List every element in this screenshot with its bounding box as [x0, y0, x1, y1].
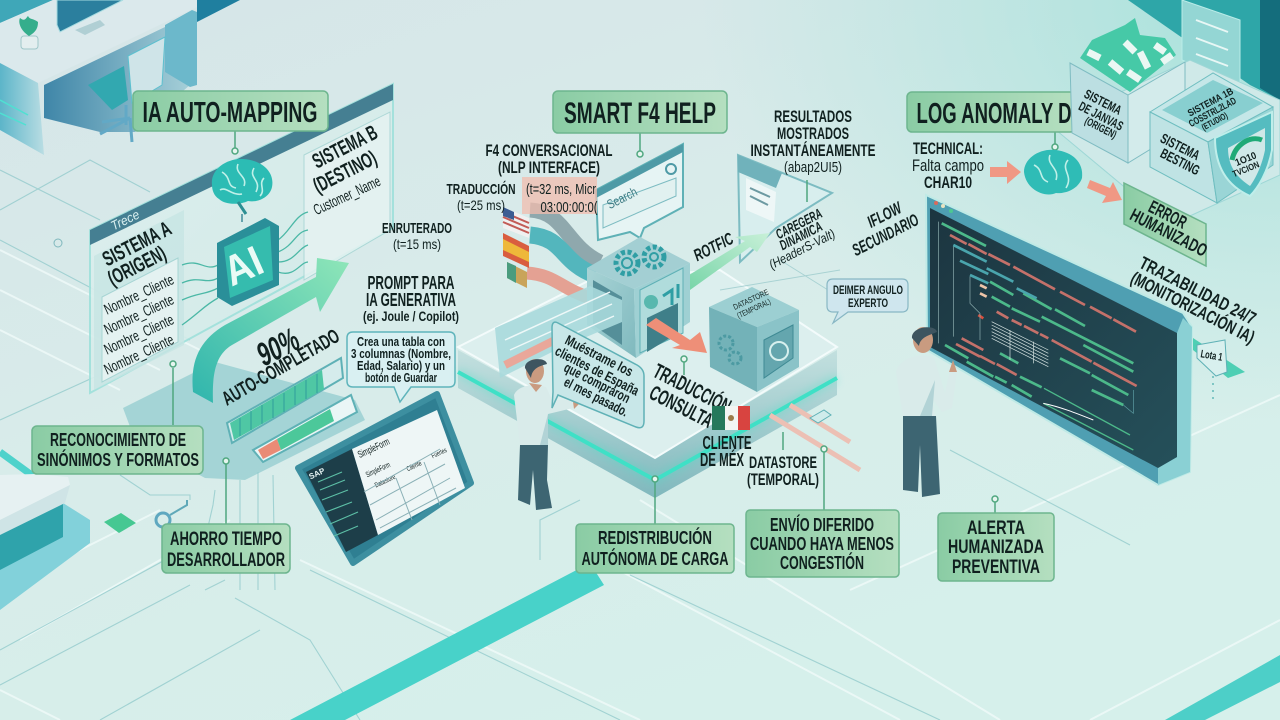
conversational F4 heading: F4 CONVERSACIONAL: [486, 141, 612, 160]
label: deferred sending: CUANDO HAYA MENOS: [750, 534, 894, 554]
routed text: (t=15 ms): [393, 236, 441, 252]
heading: Smart F4 Help: [553, 91, 727, 157]
destination box with shield: BESTING: [1158, 145, 1203, 178]
prompt callout: [347, 332, 455, 402]
speech bubble: clientes de España: [553, 343, 642, 399]
generative AI prompt heading: IA GENERATIVA: [366, 290, 456, 310]
label: autonomous redistribution: [576, 476, 734, 573]
icon: AI chip: [216, 218, 279, 306]
technical error text: Falta campo: [912, 156, 984, 175]
monitor: [57, 0, 123, 32]
column system B: [304, 112, 390, 280]
icon: shield gauge: TVCION: [1231, 159, 1261, 179]
destination box with shield: [1150, 73, 1273, 203]
label: recognition of synonyms: [32, 426, 203, 474]
icon: shield gauge: [1215, 112, 1272, 196]
device bottom left: [0, 452, 187, 610]
icon: brain: [212, 159, 272, 222]
tablet code pane: [306, 449, 378, 552]
query translation: TRADUCCIÓN: [649, 359, 735, 419]
heading: Log anomaly detection: LOG ANOMALY D: [916, 98, 1072, 130]
label: autonomous redistribution: REDISTRIBUCIÓN: [598, 527, 712, 548]
datastore label: DATASTORE: [749, 453, 817, 472]
icon: Spain flag: [503, 233, 529, 268]
person speaking: [514, 359, 580, 510]
batch document: [1193, 338, 1245, 402]
column system A: Nombre_Cliente: [102, 331, 177, 378]
route label: ROTFIC: [690, 229, 737, 265]
source box: (ORIGEN): [1082, 115, 1118, 141]
search window: [596, 144, 683, 240]
results text: RESULTADOS: [774, 107, 852, 126]
secondary iFlow: [849, 198, 922, 260]
generative AI prompt heading: PROMPT PARA: [368, 273, 454, 293]
highlighted timing block: 03:00:00:0(: [540, 199, 598, 216]
generative AI prompt heading: [363, 273, 459, 324]
green route arrow: [689, 233, 770, 290]
tablet: SimpleForm: [364, 460, 392, 479]
datastore safe: [709, 287, 799, 392]
small results window: [738, 155, 832, 262]
window title: Trece: [108, 207, 142, 233]
expert callout: EXPERTO: [848, 296, 888, 310]
prompt callout: Edad, Salario) y un: [357, 358, 445, 373]
destination box with shield: SISTEMA: [1158, 130, 1203, 163]
label: recognition of synonyms: RECONOCIMIENTO DE: [50, 430, 186, 450]
outgoing stream: [770, 405, 860, 470]
tablet: SAP: [308, 466, 327, 481]
desk left pedestal: [0, 63, 44, 155]
teal floor bands: [290, 563, 1280, 720]
column system B: Customer_Name: [311, 173, 383, 219]
arrow: to humanized error: [1087, 180, 1122, 203]
connector: recognition: [172, 368, 174, 425]
customer label: DE MÉX: [700, 449, 744, 470]
glass window on wall: [1182, 0, 1240, 85]
label: preventive alert: [938, 496, 1054, 581]
documents pile: [1080, 18, 1176, 92]
prompt callout: botón de Guardar: [365, 370, 437, 385]
under-desk shadow: [44, 15, 190, 132]
icon: shield gauge: 1O10: [1234, 150, 1259, 169]
technical error text: [912, 139, 984, 192]
dynamic load label: CAREGERA: [773, 205, 825, 242]
tablet: [298, 394, 471, 563]
speech bubble: [552, 322, 644, 428]
translation timing: TRADUCCIÓN: [446, 180, 516, 198]
results text: INSTANTÁNEAMENTE: [750, 141, 876, 160]
column system A: (ORIGEN): [104, 242, 170, 291]
batch document: Lota 1: [1200, 348, 1223, 364]
dark teal wall: [1128, 0, 1280, 100]
tablet: Fuertes: [431, 447, 448, 460]
glass window: [90, 84, 393, 393]
plant: [19, 16, 38, 49]
heading: IA auto-mapping: [133, 91, 328, 154]
green chip: [104, 513, 136, 533]
chair: [88, 37, 165, 142]
label: deferred sending: [746, 446, 899, 577]
panel: IA auto-mapping: AUTO-COMPLETADO: [218, 325, 344, 410]
destination box with shield: (ETUDIO): [1200, 110, 1229, 132]
technical error text: TECHNICAL:: [913, 139, 983, 158]
tablet: Datastore: [374, 474, 397, 489]
icon: gears: [616, 247, 664, 274]
conveyor: [495, 286, 622, 378]
secondary iFlow: SECUNDARIO: [849, 210, 922, 260]
destination box with shield: COSSTRL2LAD: [1187, 96, 1238, 130]
progress bar two: [253, 395, 357, 462]
tablet: SimpleForm: [356, 437, 392, 461]
source box: [1070, 18, 1185, 163]
label: humanized error: ERROR: [1145, 197, 1190, 233]
auto-completed figure: 90%: [250, 321, 305, 373]
results text: MOSTRADOS: [777, 124, 849, 143]
translation timing: (t=25 ms): [457, 197, 505, 213]
flags and language streams: [503, 207, 600, 298]
wall: [0, 0, 53, 23]
expert callout: [827, 279, 908, 323]
datastore safe: (TEMPORAL): [736, 297, 772, 320]
icon: log brain: [1024, 150, 1082, 194]
arrow: into brain: [990, 161, 1021, 184]
expert callout: DEIMER ANGULO: [833, 283, 903, 297]
desk top left: [0, 0, 240, 155]
dynamic load label: DINAMICA: [777, 218, 825, 253]
connectors to AI chip: [182, 212, 308, 325]
conversational F4 heading: [486, 141, 612, 177]
label: humanized error: HUMANIZADO: [1127, 205, 1211, 261]
prompt callout: Crea una tabla con: [357, 334, 445, 349]
base plate: [123, 362, 365, 480]
search window: Search: [604, 184, 640, 212]
technical error text: CHAR10: [924, 173, 972, 192]
customer label: [700, 433, 752, 470]
query translation: CONSULTA: [645, 382, 716, 433]
tablet form pane: [352, 410, 465, 535]
speech bubble: que compraron: [562, 359, 633, 406]
speech bubble: Muéstrame los: [563, 332, 636, 380]
generative AI prompt heading: (ej. Joule / Copilot): [363, 308, 459, 324]
base platform: [1050, 60, 1280, 225]
heading: Smart F4 Help: SMART F4 HELP: [564, 97, 716, 130]
panel: IA auto-mapping: [90, 84, 393, 524]
icon: AI chip: AI: [216, 237, 270, 295]
column system A: Nombre_Cliente: [102, 311, 177, 358]
cube front panel: [640, 268, 683, 353]
label: autonomous redistribution: AUTÓNOMA DE CARGA: [582, 548, 728, 569]
source box: DE JANVAS: [1076, 98, 1126, 134]
dynamic load label: [766, 205, 837, 272]
panel: top right: [1050, 0, 1280, 225]
datastore label: [747, 453, 819, 489]
desk right leg: [165, 10, 197, 87]
icon: third flag: [507, 262, 527, 288]
column system B: (DESTINO): [310, 147, 381, 198]
datastore safe: DATASTORE: [732, 288, 770, 312]
window title bar: [90, 84, 393, 245]
routed text: ENRUTERADO: [382, 220, 452, 237]
cube side opening: [593, 280, 622, 345]
highlighted timing block: [522, 177, 598, 216]
label: preventive alert: PREVENTIVA: [952, 557, 1040, 578]
label: developer time saved: [162, 524, 290, 573]
column system A: [94, 210, 184, 390]
destination box with shield: SISTEMA 1B: [1186, 86, 1235, 119]
translation timing: [446, 180, 516, 213]
log monitor: [926, 195, 1192, 485]
label: developer time saved: AHORRO TIEMPO: [170, 529, 282, 550]
label: deferred sending: ENVÍO DIFERIDO: [770, 514, 874, 535]
icon: USA flag: [503, 207, 529, 238]
speech bubble: el mes pasado.: [561, 374, 631, 420]
prompt callout: 3 columnas (Nombre,: [351, 346, 451, 361]
highlighted timing block: (t=32 ms, Micr: [526, 181, 596, 198]
panel: central platform: [458, 260, 860, 498]
icon: Mexico flag: [712, 406, 750, 430]
connector: savings: [225, 464, 227, 524]
source box: SISTEMA: [1082, 86, 1125, 118]
person pointing: [896, 327, 957, 497]
column system A: Nombre_Cliente: [102, 291, 177, 338]
label: preventive alert: ALERTA: [967, 518, 1025, 539]
datastore label: (TEMPORAL): [747, 470, 819, 489]
conversational F4 heading: (NLP INTERFACE): [498, 158, 600, 177]
results text: [750, 107, 876, 202]
results text: (abap2UI5): [784, 159, 842, 176]
column system B: SISTEMA B: [309, 121, 381, 173]
heading: Log anomaly detection: [907, 92, 1075, 150]
progress bar one: [227, 358, 343, 443]
heading: IA auto-mapping: IA AUTO-MAPPING: [142, 97, 318, 129]
label: humanized error: [1124, 183, 1211, 266]
red output arrow: [646, 318, 707, 353]
big arrow: [192, 258, 349, 403]
customer label: CLIENTE: [702, 433, 752, 453]
label: preventive alert: HUMANIZADA: [948, 537, 1044, 558]
column system A: SISTEMA A: [99, 217, 175, 271]
label: developer time saved: DESARROLLADOR: [167, 550, 285, 571]
label: deferred sending: CONGESTIÓN: [780, 552, 864, 573]
routed text: [382, 220, 452, 252]
central cube: [495, 237, 690, 378]
secondary iFlow: IFLOW: [864, 198, 906, 232]
ring node: [156, 513, 170, 527]
tablet: Cliente: [406, 460, 423, 473]
desk surface: [0, 0, 197, 83]
label: recognition of synonyms: SINÓNIMOS Y FORMATOS: [37, 449, 199, 470]
dynamic load label: (HeaderS-Valt): [766, 226, 837, 272]
log rows: [938, 222, 1137, 450]
column system A: Nombre_Cliente: [102, 271, 177, 318]
query translation: [645, 356, 735, 433]
